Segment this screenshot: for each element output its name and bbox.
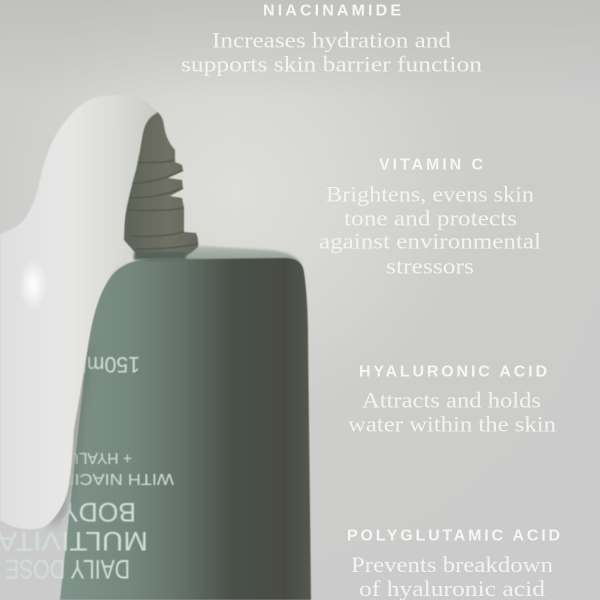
description (348, 388, 556, 436)
description: stressors (386, 254, 474, 278)
WITH NIACINAMIDE: WITH NIACINAMIDE (4, 470, 174, 487)
tube label text (0, 352, 174, 584)
tube nozzle (124, 112, 198, 258)
description (181, 28, 482, 76)
tube body (60, 258, 311, 600)
heading: VITAMIN C (379, 156, 483, 174)
description: Prevents breakdown (351, 552, 553, 577)
cream shadow (50, 340, 92, 530)
description (351, 552, 553, 600)
description: Attracts and holds (362, 388, 541, 412)
BODY: BODY (61, 497, 136, 527)
cream highlight (19, 259, 47, 311)
+ HYALURONIC: + HYALURONIC (17, 449, 132, 466)
tube shoulder (180, 246, 302, 270)
150ml: 150ml (82, 352, 140, 377)
description: water within the skin (348, 412, 556, 436)
ingredient: hyaluronic acid (348, 364, 556, 436)
cream body (0, 95, 157, 529)
ingredient: polyglutamic acid (347, 528, 560, 600)
description: tone and protects (344, 206, 517, 230)
product tube (0, 112, 311, 600)
description: Brightens, evens skin (326, 182, 534, 206)
description: supports skin barrier function (181, 52, 482, 76)
ingredient: vitamin c (319, 156, 541, 278)
heading: POLYGLUTAMIC ACID (347, 528, 560, 544)
nozzle base shadow (134, 252, 186, 260)
description: Increases hydration and (212, 28, 451, 52)
heading: NIACINAMIDE (263, 2, 401, 20)
description: against environmental (319, 228, 541, 254)
cream swirl (0, 95, 157, 530)
ingredient: niacinamide (181, 2, 482, 76)
description (319, 182, 541, 278)
heading: HYALURONIC ACID (359, 364, 547, 380)
